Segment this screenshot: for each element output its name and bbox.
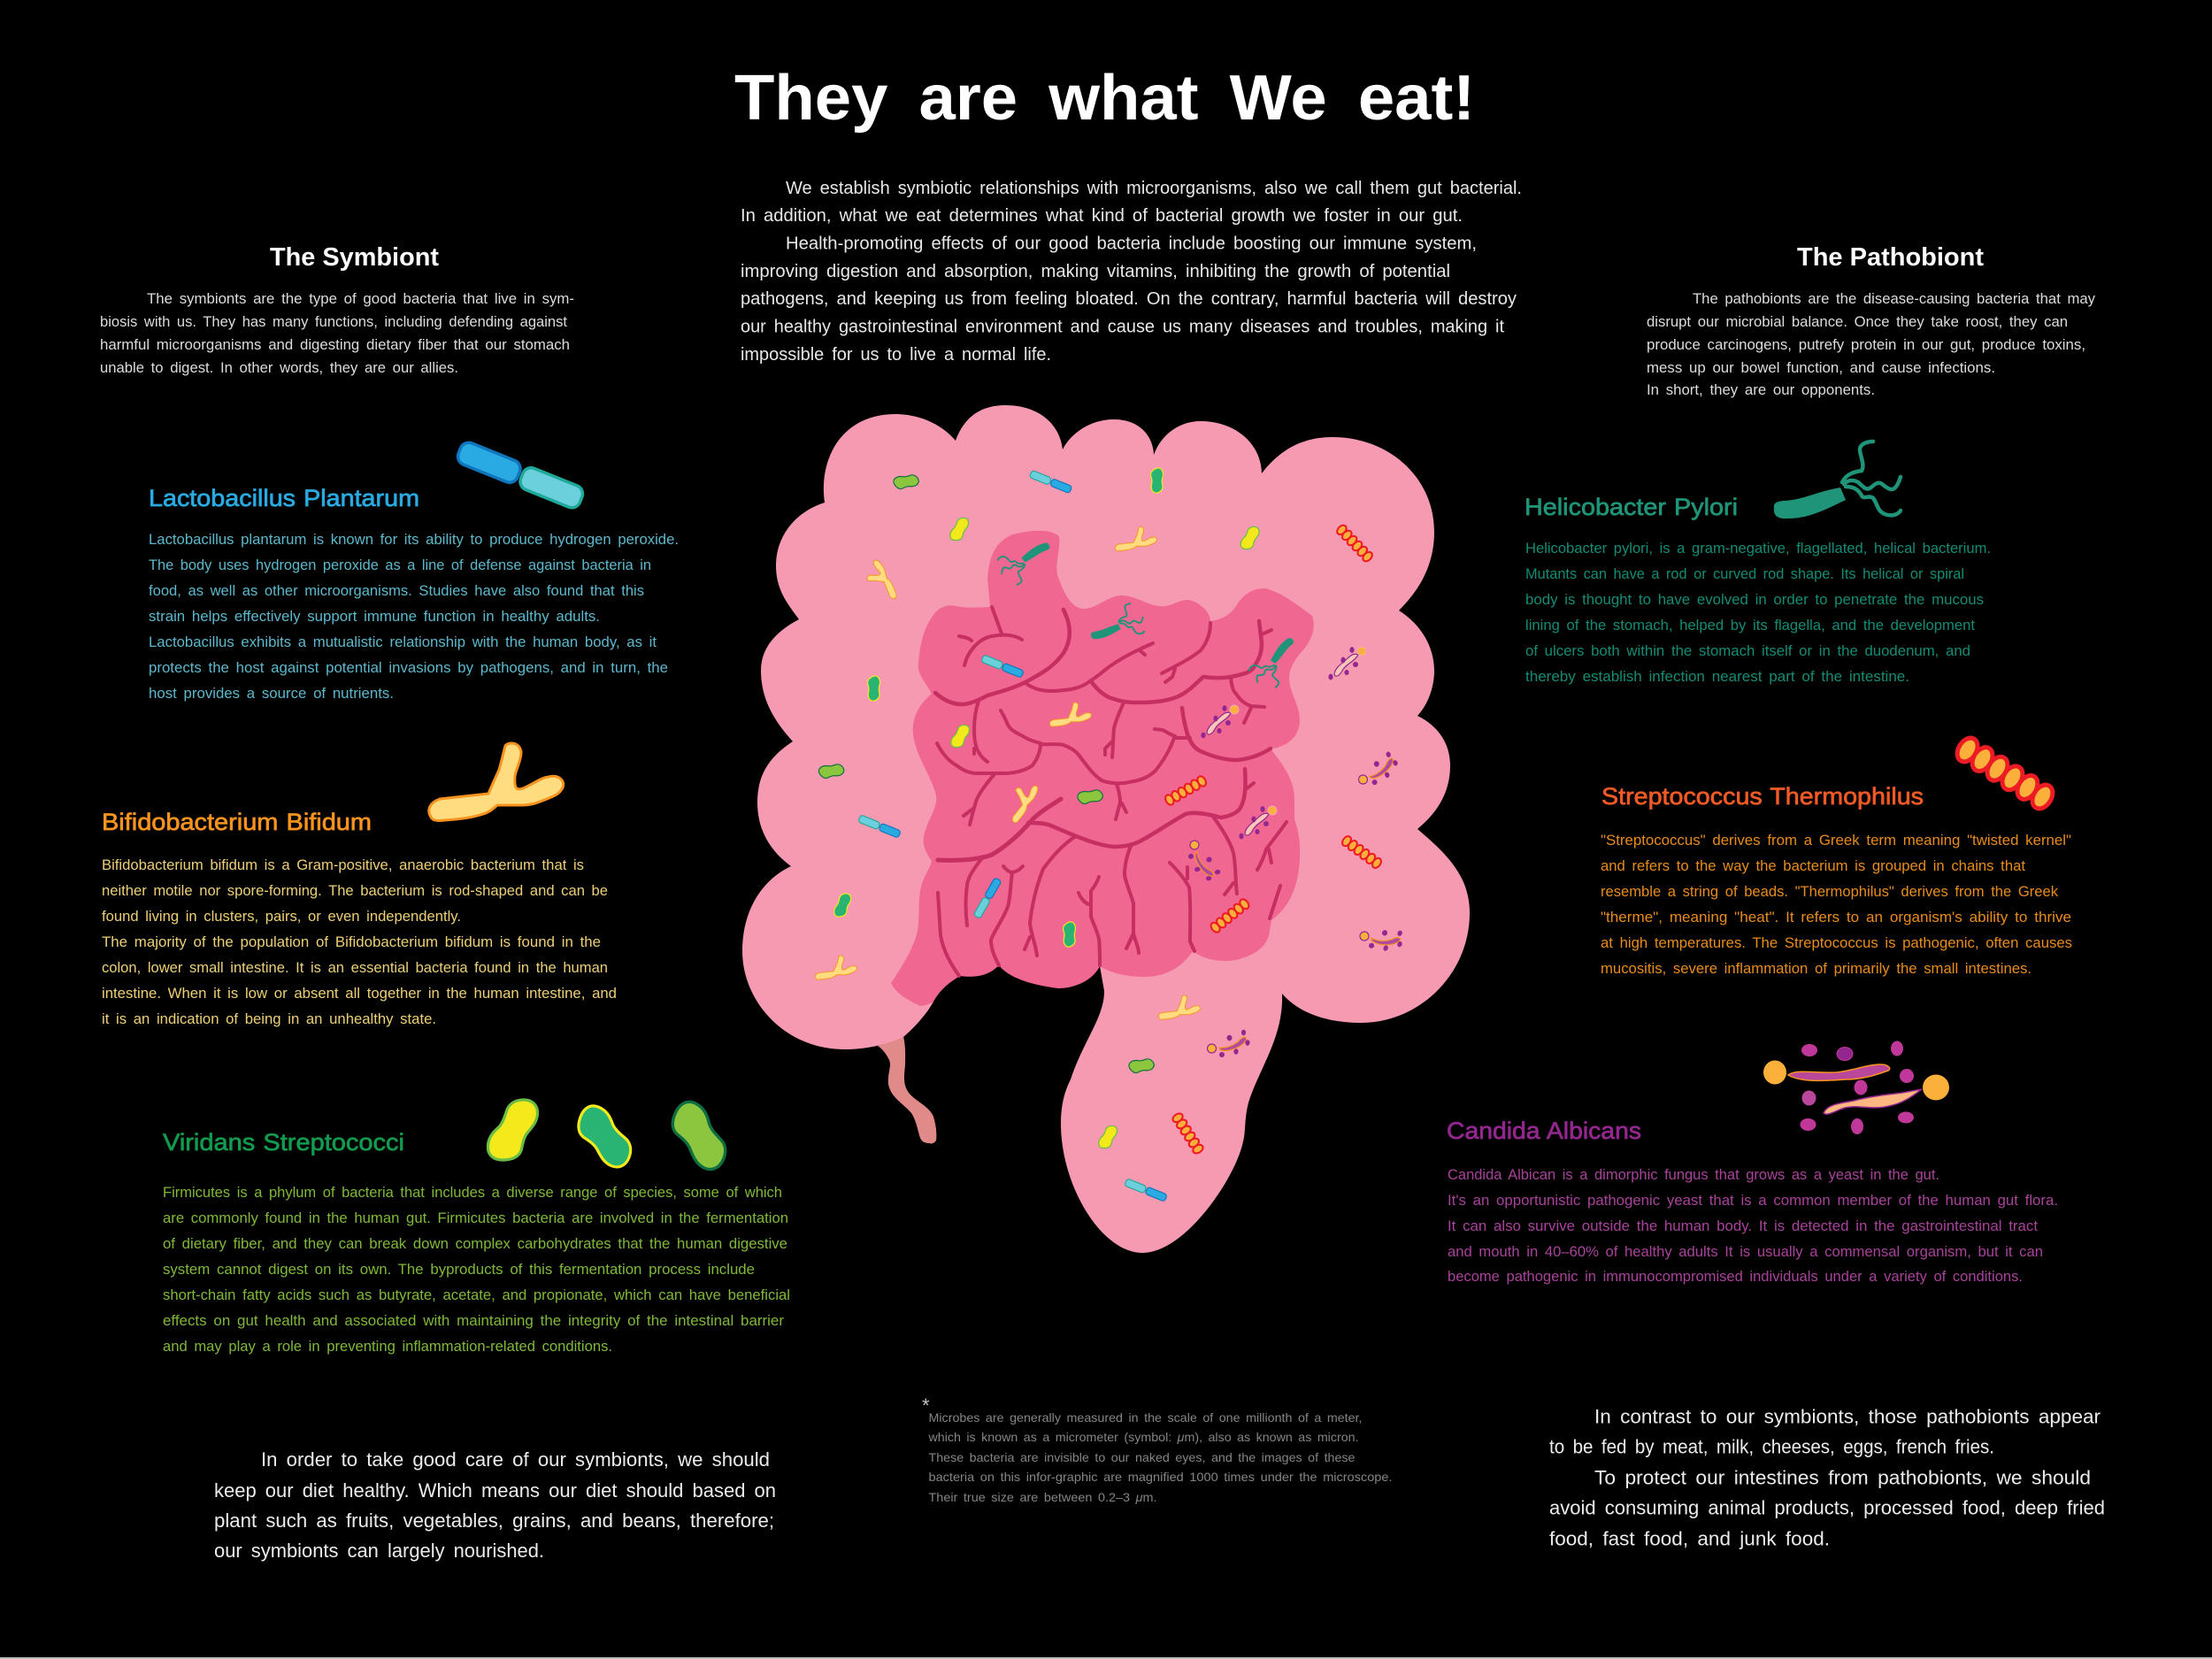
bacteria: streptococcus — [1164, 524, 1383, 1155]
description: of dietary fiber, and they can break down complex carbohydrates that the human digestive — [163, 1236, 787, 1252]
panel: the pathobiont — [1647, 243, 2096, 398]
icon: three viridans beans — [488, 1097, 741, 1174]
pathobiont description: produce carcinogens, putrefy protein in our gut, produce toxins, — [1647, 337, 2085, 353]
pathobiont description — [1647, 291, 2096, 398]
advice: pathobionts: In contrast to our symbionts, those pathobionts appear — [1594, 1405, 2101, 1428]
description: effects on gut health and associated with maintaining the integrity of the intestinal barrier — [163, 1313, 785, 1329]
intro text block: In addition, what we eat determines what kind of bacterial growth we foster in our gut. — [741, 205, 1463, 226]
description — [163, 1185, 790, 1355]
icon: helicobacter — [1774, 442, 1901, 518]
intro text block: impossible for us to live a normal life. — [741, 344, 1051, 365]
intro text block: pathogens, and keeping us from feeling bloated. On the contrary, harmful bacteria will destroy — [741, 288, 1517, 309]
icon: candida — [1763, 1041, 1949, 1134]
bacteria: viridans — [817, 466, 1259, 1148]
panel: streptococcus thermophilus — [1601, 734, 2072, 977]
advice: pathobionts: food, fast food, and junk food. — [1549, 1527, 1830, 1550]
intro text block: our healthy gastrointestinal environment and cause us many diseases and troubles, making it — [741, 317, 1504, 336]
intro text block: improving digestion and absorption, making vitamins, inhibiting the growth of potential — [741, 261, 1450, 281]
description: The body uses hydrogen peroxide as a line of defense against bacteria in — [149, 557, 651, 573]
description: resemble a string of beads. "Thermophilus" derives from the Greek — [1601, 884, 2059, 900]
advice: pathobionts: avoid consuming animal products, processed food, deep fried — [1549, 1497, 2105, 1518]
description: short-chain fatty acids such as butyrate, acetate, and propionate, which can have beneficial — [163, 1287, 790, 1303]
description — [1448, 1167, 2058, 1285]
pathobiont description: In short, they are our opponents. — [1647, 382, 1875, 398]
description: protects the host against potential invasions by pathogens, and in turn, the — [149, 660, 668, 676]
description: strain helps effectively support immune function in healthy adults. — [149, 609, 600, 625]
advice: symbionts — [214, 1448, 776, 1562]
footnote: microbe scale: which is known as a micrometer (symbol: μm), also as known as micron. — [927, 1430, 1359, 1444]
symbiont description: harmful microorganisms and digesting dietary fiber that our stomach — [100, 337, 570, 353]
advice: symbionts: keep our diet healthy. Which means our diet should based on — [214, 1479, 776, 1502]
advice: pathobionts: to be fed by meat, milk, cheeses, eggs, french fries. — [1549, 1435, 1994, 1458]
heading: Streptococcus Thermophilus — [1601, 783, 1924, 810]
description: It's an opportunistic pathogenic yeast that is a common member of the human gut flora. — [1448, 1193, 2058, 1209]
pathobiont description: disrupt our microbial balance. Once they take roost, they can — [1647, 314, 2068, 330]
heading: Candida Albicans — [1447, 1118, 1641, 1144]
description — [102, 857, 617, 1027]
description: Mutants can have a rod or curved rod shape. Its helical or spiral — [1525, 566, 1964, 582]
description: at high temperatures. The Streptococcus is pathogenic, often causes — [1601, 935, 2072, 951]
description: Candida Albican is a dimorphic fungus that grows as a yeast in the gut. — [1448, 1167, 1939, 1183]
description: colon, lower small intestine. It is an essential bacteria found in the human — [102, 960, 608, 976]
description: and refers to the way the bacterium is grouped in chains that — [1601, 858, 2025, 874]
description: body is thought to have evolved in order to penetrate the mucous — [1525, 592, 1984, 608]
symbiont description: biosis with us. They has many functions, including defending against — [100, 314, 567, 330]
chart: intestine illustration — [742, 405, 1470, 1253]
description: host provides a source of nutrients. — [149, 686, 394, 702]
description — [149, 532, 679, 702]
panel: lactobacillus plantarum — [149, 440, 679, 702]
description: and may play a role in preventing inflammation-related conditions. — [163, 1339, 612, 1355]
appendix — [878, 1036, 936, 1144]
symbiont description: The symbionts are the type of good bacteria that live in sym- — [147, 291, 574, 307]
footnote: microbe scale: bacteria on this infor-graphic are magnified 1000 times under the microscope. — [929, 1470, 1393, 1484]
footnote: microbe scale: Microbes are generally measured in the scale of one millionth of a meter, — [929, 1410, 1363, 1425]
description: and mouth in 40–60% of healthy adults It is usually a commensal organism, but it can — [1448, 1244, 2043, 1260]
advice: symbionts: In order to take good care of our symbionts, we should — [261, 1448, 770, 1471]
advice: symbionts: our symbionts can largely nourished. — [214, 1540, 544, 1562]
footnote: microbe scale: These bacteria are invisible to our naked eyes, and the images of these — [929, 1450, 1356, 1464]
description: Firmicutes is a phylum of bacteria that includes a diverse range of species, some of which — [163, 1185, 782, 1201]
symbiont description — [100, 291, 574, 376]
intestinal folds — [935, 607, 1286, 976]
panel: viridans streptococci — [163, 1097, 790, 1355]
bacteria: candida — [1185, 647, 1407, 1057]
description: "Streptococcus" derives from a Greek term meaning "twisted kernel" — [1601, 833, 2071, 849]
description: Lactobacillus exhibits a mutualistic relationship with the human body, as it — [149, 634, 657, 650]
advice: pathobionts: To protect our intestines from pathobionts, we should — [1594, 1467, 2091, 1488]
heading: Helicobacter Pylori — [1525, 494, 1738, 520]
description — [1525, 541, 1991, 685]
description: found living in clusters, pairs, or even independently. — [102, 909, 461, 925]
footnote: microbe scale: * — [922, 1394, 930, 1417]
title: They are what We eat! — [734, 63, 1475, 134]
advice: symbionts: plant such as fruits, vegetables, grains, and beans, therefore; — [214, 1509, 774, 1532]
pathobiont description: mess up our bowel function, and cause infections. — [1647, 360, 1995, 376]
description: of ulcers both within the stomach itself or in the duodenum, and — [1525, 643, 1970, 659]
description: mucositis, severe inflammation of primarily the small intestines. — [1601, 961, 2032, 977]
description: Bifidobacterium bifidum is a Gram-positive, anaerobic bacterium that is — [102, 857, 584, 873]
panel: the symbiont — [100, 243, 574, 376]
icon: bifidobacterium — [429, 743, 564, 821]
description: food, as well as other microorganisms. Studies have also found that this — [149, 583, 644, 599]
description: lining of the stomach, helped by its flagella, and the development — [1525, 618, 1975, 634]
description: It can also survive outside the human body. It is detected in the gastrointestinal tract — [1448, 1218, 2038, 1234]
heading: Bifidobacterium Bifidum — [102, 809, 372, 835]
description: thereby establish infection nearest part of the intestine. — [1525, 669, 1909, 685]
advice: pathobionts — [1549, 1405, 2105, 1550]
description — [1601, 833, 2072, 977]
description: it is an indication of being in an unhealthy state. — [102, 1011, 436, 1027]
description: The majority of the population of Bifidobacterium bifidum is found in the — [102, 934, 601, 950]
description: "therme", meaning "heat". It refers to an organism's ability to thrive — [1601, 910, 2071, 926]
symbiont description: unable to digest. In other words, they are our allies. — [100, 360, 458, 376]
icon: streptococcus chain — [1953, 734, 2057, 812]
description: Helicobacter pylori, is a gram-negative, flagellated, helical bacterium. — [1525, 541, 1991, 557]
bacteria: lactobacillus — [858, 470, 1167, 1202]
intro text block: Health-promoting effects of our good bacteria include boosting our immune system, — [786, 234, 1477, 253]
description: are commonly found in the human gut. Firmicutes bacteria are involved in the fermentation — [163, 1210, 788, 1226]
intro text block: We establish symbiotic relationships with microorganisms, also we call them gut bacterial. — [786, 178, 1522, 198]
panel: candida albicans — [1447, 1041, 2058, 1285]
pathobiont description: The pathobionts are the disease-causing bacteria that may — [1693, 291, 2096, 307]
intro text block — [741, 178, 1522, 365]
large intestine — [742, 405, 1470, 1253]
footnote: microbe scale — [922, 1394, 1393, 1504]
icon: lactobacillus — [456, 440, 585, 511]
heading: Viridans Streptococci — [163, 1129, 404, 1156]
heading: Lactobacillus Plantarum — [149, 485, 419, 511]
description: system cannot digest on its own. The byproducts of this fermentation process include — [163, 1262, 755, 1278]
bacteria: bifidobacterium — [815, 527, 1200, 1019]
panel: bifidobacterium bifidum — [102, 743, 617, 1027]
heading: the symbiont: The Symbiont — [270, 243, 439, 272]
footnote: microbe scale: Their true size are between 0.2–3 μm. — [929, 1490, 1157, 1504]
bacteria: helicobacter — [997, 542, 1310, 694]
small intestine — [891, 531, 1314, 1006]
panel: helicobacter pylori — [1525, 442, 1991, 685]
description: Lactobacillus plantarum is known for its ability to produce hydrogen peroxide. — [149, 532, 679, 548]
description: neither motile nor spore-forming. The bacterium is rod-shaped and can be — [102, 883, 608, 899]
description: intestine. When it is low or absent all together in the human intestine, and — [102, 986, 617, 1002]
heading: the pathobiont: The Pathobiont — [1797, 243, 1984, 272]
description: become pathogenic in immunocompromised individuals under a variety of conditions. — [1448, 1269, 2023, 1285]
